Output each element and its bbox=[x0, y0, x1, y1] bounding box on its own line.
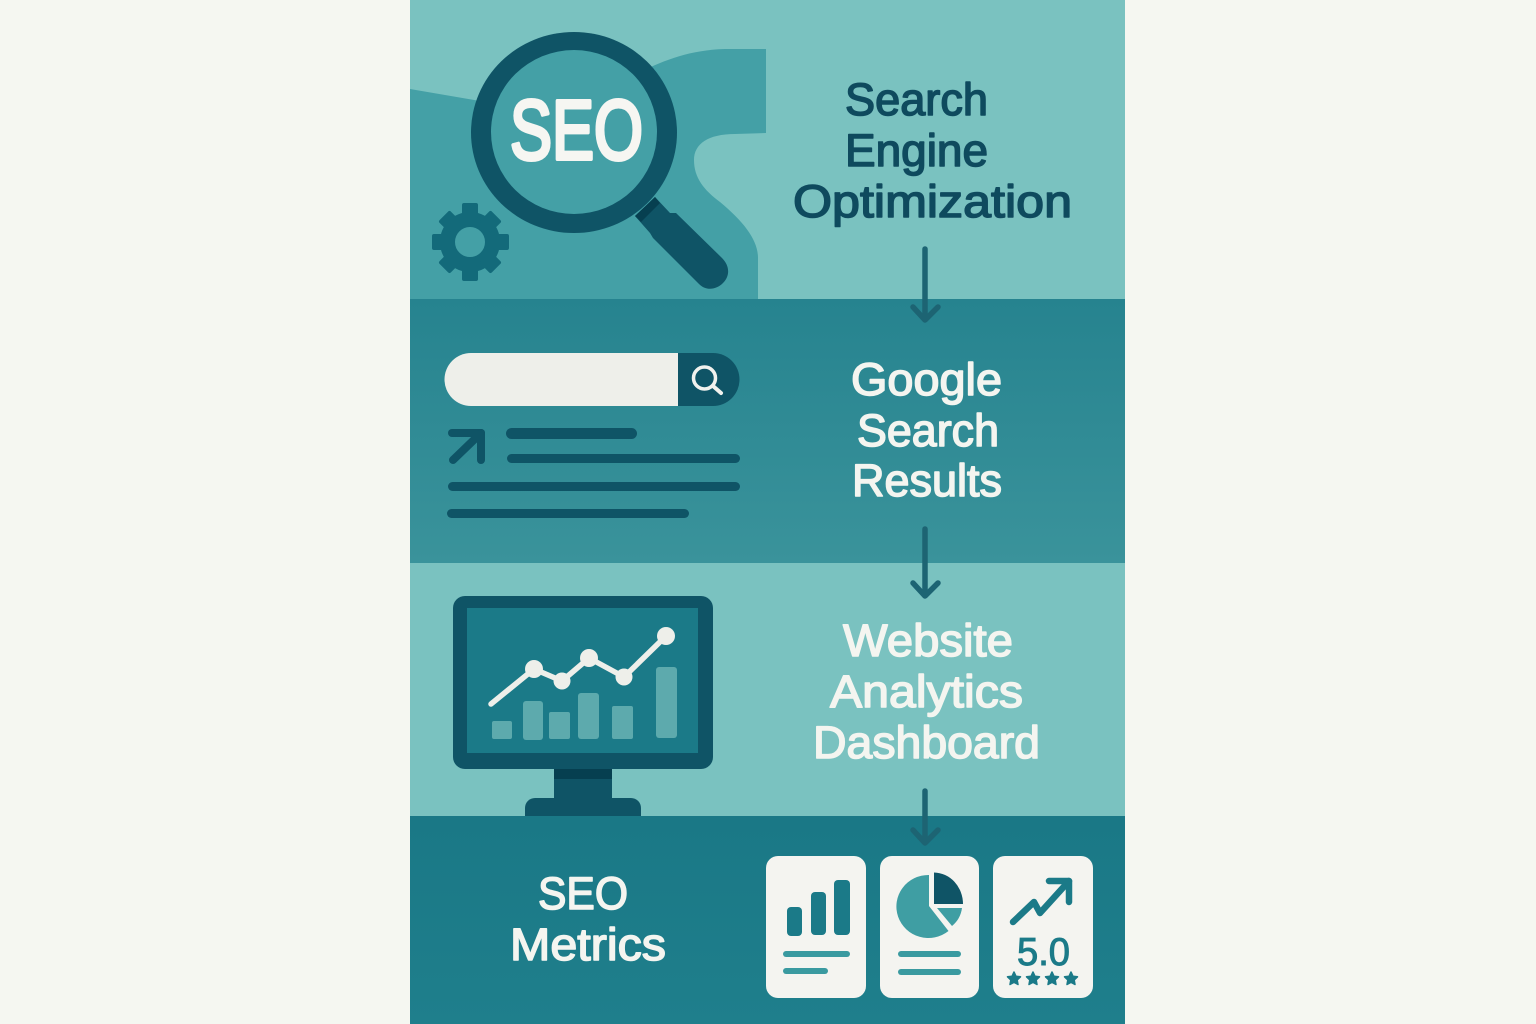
heading: website analytics dashboard: Analytics bbox=[830, 666, 1023, 717]
arrow: seo to search results bbox=[913, 249, 938, 320]
heading: google search results: Results bbox=[852, 455, 1002, 506]
heading: website analytics dashboard: Dashboard bbox=[813, 717, 1040, 768]
icon: gear bbox=[432, 203, 509, 281]
icon: diagonal arrow bbox=[452, 433, 481, 460]
card: rating bbox=[993, 856, 1093, 998]
heading: search engine optimization bbox=[793, 74, 1072, 227]
heading: seo metrics: SEO bbox=[538, 868, 628, 919]
heading: google search results: Google bbox=[851, 354, 1002, 405]
card: rating: 5.0 bbox=[1017, 931, 1070, 974]
heading: website analytics dashboard bbox=[813, 615, 1040, 768]
heading: google search results: Search bbox=[857, 405, 999, 456]
search bar bbox=[444, 353, 740, 406]
line chart bbox=[491, 627, 675, 704]
arrow: search results to analytics bbox=[913, 529, 938, 596]
panel: seo metrics bbox=[410, 816, 1125, 1024]
heading: search engine optimization: Search bbox=[845, 74, 988, 125]
background blob bbox=[410, 49, 766, 299]
arrow: analytics to metrics bbox=[913, 791, 938, 843]
card: pie chart bbox=[880, 856, 979, 998]
icon: monitor bbox=[453, 596, 713, 816]
heading: website analytics dashboard: Website bbox=[843, 615, 1013, 666]
result text lines bbox=[447, 428, 740, 518]
heading: seo metrics bbox=[510, 868, 666, 970]
bar chart bbox=[492, 667, 677, 740]
panel: google search results bbox=[410, 299, 1125, 563]
panel: website analytics dashboard bbox=[410, 563, 1125, 816]
icon: magnifying glass bbox=[471, 32, 728, 289]
heading: seo metrics: Metrics bbox=[510, 919, 666, 970]
SEO lens text: SEO bbox=[510, 83, 643, 177]
heading: google search results bbox=[851, 354, 1002, 506]
heading: search engine optimization: Engine bbox=[845, 125, 988, 176]
panel: search engine optimization bbox=[410, 0, 1125, 299]
heading: search engine optimization: Optimization bbox=[793, 176, 1072, 227]
card: bar chart bbox=[766, 856, 866, 998]
